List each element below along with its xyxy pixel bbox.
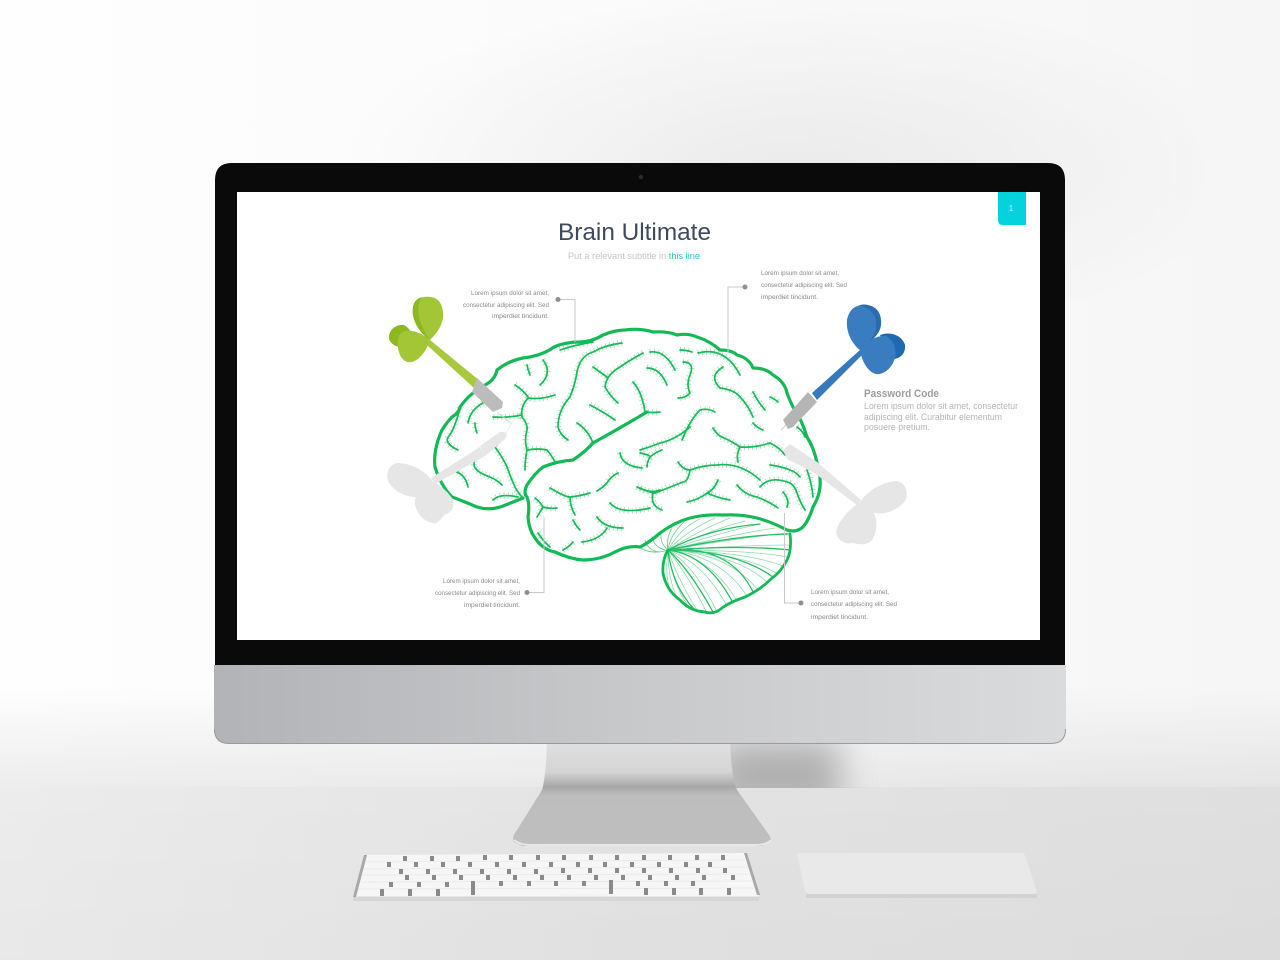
text block: password code: Password Code	[864, 388, 939, 400]
callout: bottom right: consectetur adipiscing elit. Sed	[811, 601, 897, 608]
brain illustration	[435, 329, 820, 613]
sulci lines	[447, 342, 813, 550]
subtitle: Put a relevant subtitle in this line	[568, 251, 700, 262]
dart: blue	[781, 305, 905, 430]
callout: bottom left: imperdiet tincidunt.	[464, 602, 520, 609]
desk surface	[0, 787, 1280, 960]
callout: top right: Lorem ipsum dolor sit amet,	[761, 270, 839, 277]
callout: bottom left: Lorem ipsum dolor sit amet,	[443, 578, 520, 585]
page number tab	[998, 192, 1026, 225]
monitor chin	[214, 665, 1066, 744]
sulci hatching	[447, 342, 813, 550]
title: Brain Ultimate	[558, 219, 711, 246]
text block: password code	[864, 388, 1018, 433]
trackpad	[797, 853, 1037, 898]
slide screen	[237, 192, 1040, 640]
camera	[639, 175, 643, 179]
monitor stand shadow	[730, 744, 857, 788]
dart: green	[389, 297, 512, 424]
page number tab: 1	[1009, 204, 1014, 213]
callout: top left: Lorem ipsum dolor sit amet,	[471, 290, 549, 297]
keyboard	[353, 853, 760, 901]
monitor stand	[513, 743, 771, 846]
text block: password code: posuere pretium.	[864, 422, 930, 433]
dart: faded grey right	[783, 444, 907, 544]
callout: top right: imperdiet tincidunt.	[761, 294, 818, 301]
callout: top left: imperdiet tincidunt.	[492, 313, 549, 320]
cerebellum fan lines	[636, 518, 790, 613]
callout: bottom right: Lorem ipsum dolor sit amet,	[811, 589, 889, 596]
text block: password code: Lorem ipsum dolor sit amet, consectetur	[864, 401, 1018, 412]
callout: top right: consectetur adipiscing elit. Sed	[761, 282, 847, 289]
callout: bottom left	[435, 517, 544, 609]
callout: bottom left: consectetur adipiscing elit. Sed	[435, 590, 520, 597]
callout: top right	[728, 270, 847, 352]
text block: password code: adipiscing elit. Curabitur elementum	[864, 412, 1002, 423]
monitor body	[214, 163, 1066, 744]
callout: bottom right: imperdiet tincidunt.	[811, 614, 868, 621]
callout: top left	[463, 290, 575, 342]
callout: top left: consectetur adipiscing elit. Sed	[463, 302, 549, 309]
black bezel	[215, 163, 1065, 665]
callout: bottom right	[784, 513, 897, 621]
dart: faded grey left	[387, 421, 513, 523]
brain outline	[435, 329, 820, 560]
cerebellum outline	[663, 534, 791, 613]
